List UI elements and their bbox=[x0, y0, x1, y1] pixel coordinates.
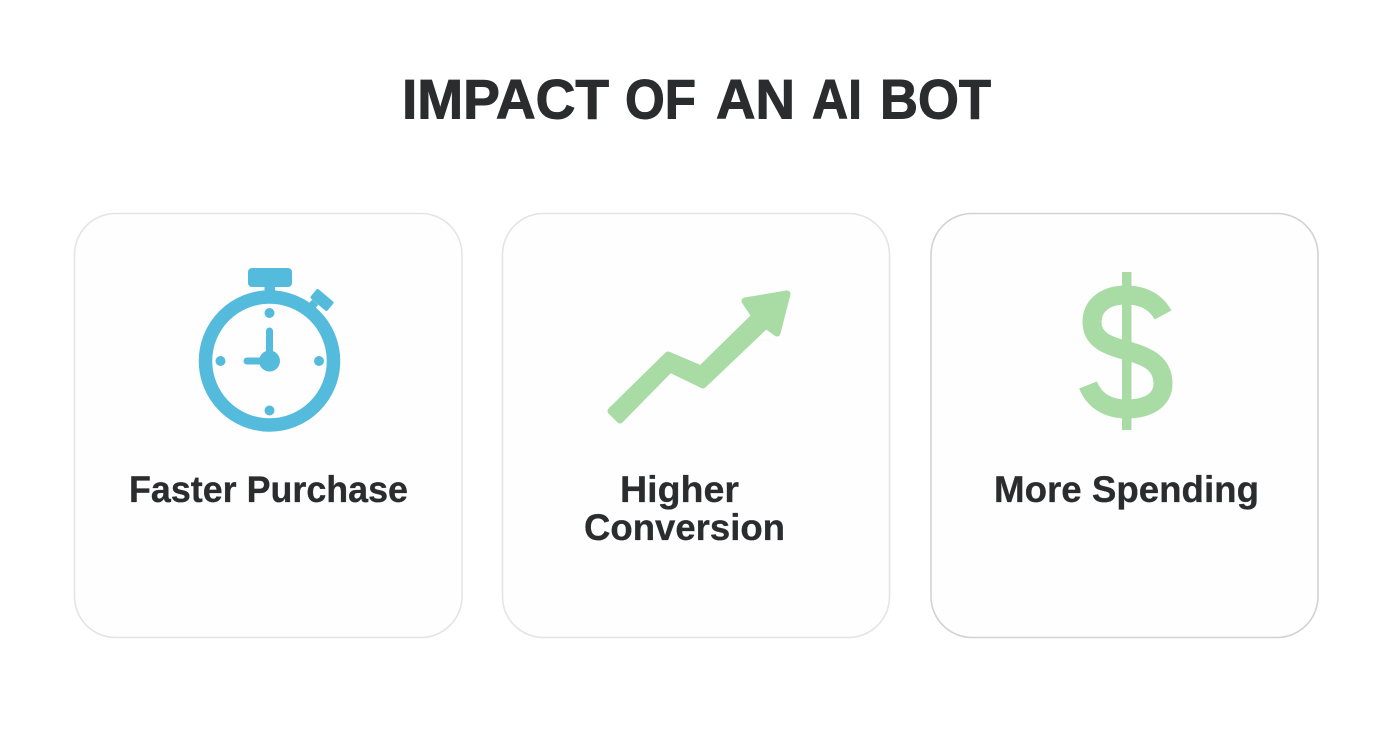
title: AI bbox=[812, 68, 862, 130]
icon: stopwatch bbox=[206, 268, 334, 425]
label line: conversion: Conversion bbox=[584, 507, 785, 548]
title: BOT bbox=[880, 68, 991, 130]
label line: higher: Higher bbox=[620, 469, 739, 510]
label: faster purchase: Faster Purchase bbox=[129, 469, 408, 510]
panel: higher conversion bbox=[502, 214, 890, 638]
card outline: faster purchase bbox=[74, 214, 462, 638]
title: AN bbox=[716, 68, 795, 130]
panel: faster purchase bbox=[74, 214, 462, 638]
label: more spending: More Spending bbox=[994, 469, 1259, 510]
title: IMPACT bbox=[402, 68, 609, 130]
card outline: more spending bbox=[931, 214, 1318, 638]
panel: more spending bbox=[931, 214, 1318, 638]
title: OF bbox=[625, 68, 696, 130]
card outline: higher conversion bbox=[502, 214, 890, 638]
icon: rising arrow bbox=[611, 294, 787, 420]
icon: dollar sign bbox=[1088, 272, 1163, 430]
label: higher conversion bbox=[584, 469, 785, 548]
